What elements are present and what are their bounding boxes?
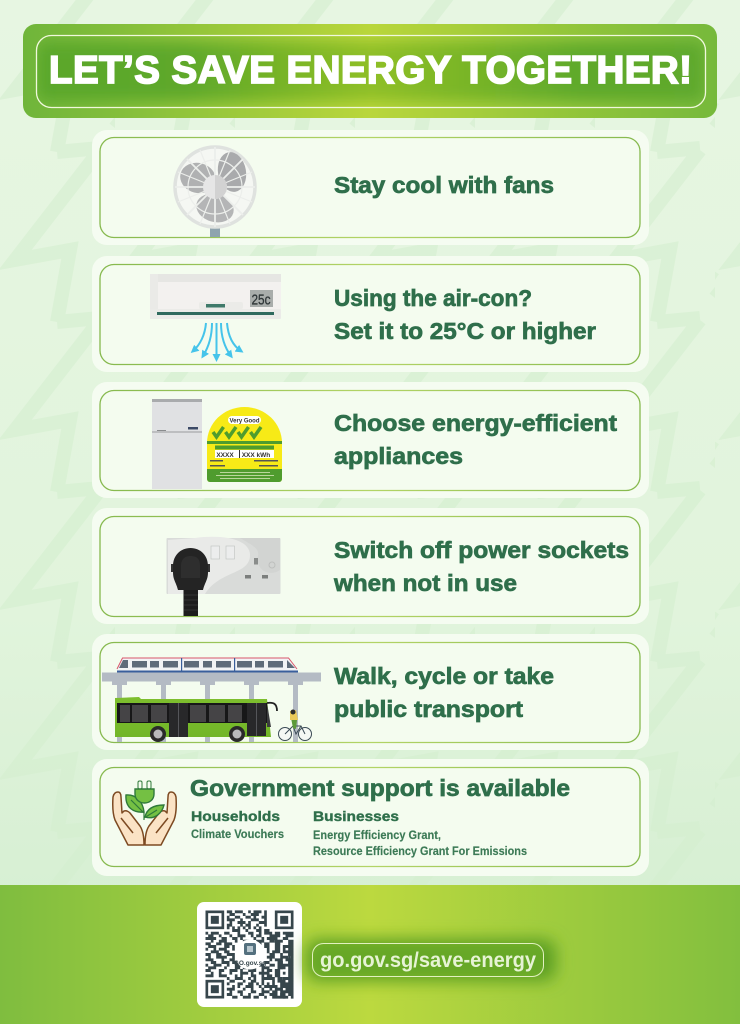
icon: fridge <box>152 399 202 489</box>
households: Climate Vouchers <box>191 827 284 841</box>
icon: air conditioner <box>150 274 281 359</box>
icon: fan <box>175 147 255 237</box>
URL pill: go.gov.sg/save-energy <box>320 949 536 972</box>
icon: bus <box>115 697 277 742</box>
businesses: Businesses <box>313 808 399 824</box>
URL pill <box>306 939 556 981</box>
icon: cyclist <box>278 710 312 740</box>
icon: plug and socket <box>166 537 280 616</box>
businesses <box>313 808 527 858</box>
icon: energy label: XXX kWh <box>242 452 270 459</box>
businesses: Energy Efficiency Grant, <box>313 828 441 842</box>
panel: air-con: Set it to 25°C or higher <box>334 318 596 344</box>
panel: transport <box>92 634 649 750</box>
text: Using the air-con? <box>334 285 532 311</box>
footer <box>0 885 740 1024</box>
panel: power sockets <box>92 508 649 624</box>
text: Switch off power sockets <box>334 537 629 563</box>
households: Households <box>191 808 280 824</box>
icon: energy label <box>207 407 282 482</box>
icon: hands holding plug and leaves <box>113 781 176 845</box>
QR code <box>197 902 302 1007</box>
heading: Government support is available <box>190 775 570 801</box>
title banner <box>23 24 717 118</box>
panel: stay cool with fans <box>92 130 649 245</box>
households <box>191 808 284 841</box>
text: Stay cool with fans <box>334 172 554 198</box>
businesses: Resource Efficiency Grant For Emissions <box>313 844 527 858</box>
panel: transport: public transport <box>334 696 523 722</box>
panel: energy-efficient appliances <box>92 382 649 498</box>
text: Walk, cycle or take <box>334 663 554 689</box>
icon: train on viaduct <box>102 658 321 742</box>
icon: energy label: Very Good <box>229 418 260 424</box>
panel: energy-efficient appliances: appliances <box>334 443 463 469</box>
icon: air conditioner: 25c <box>252 292 271 308</box>
QR centre logo: GO.gov.sg <box>234 960 266 967</box>
panel: power sockets: when not in use <box>333 570 517 596</box>
icon: energy label: XXXX <box>216 452 234 459</box>
text: Choose energy-efficient <box>334 410 617 436</box>
panel: air-con <box>92 256 649 372</box>
title: LET’S SAVE ENERGY TOGETHER! <box>49 49 692 92</box>
panel: government support <box>92 759 649 876</box>
